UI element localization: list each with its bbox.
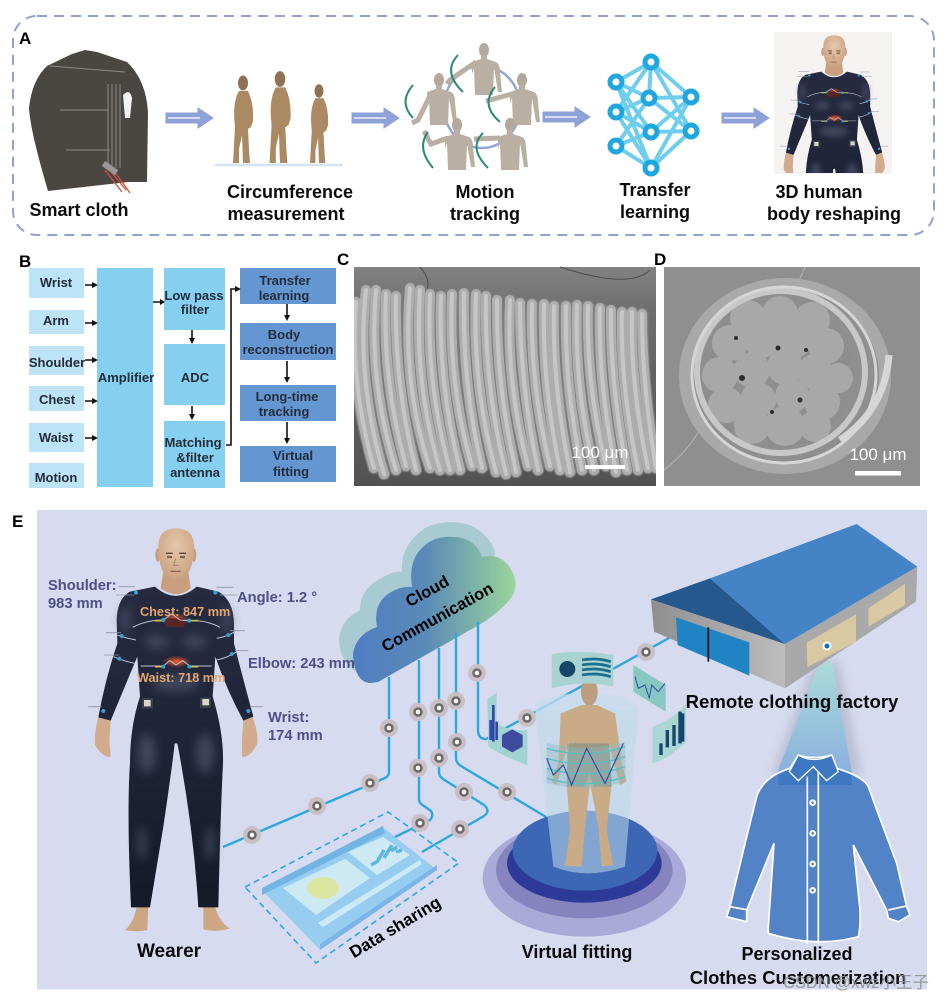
panel E background xyxy=(37,510,927,990)
filter and ADC column: antenna xyxy=(170,465,221,480)
sensor input boxes: Shoulder xyxy=(29,355,85,370)
network nodes xyxy=(243,643,655,844)
sensor input boxes: Motion xyxy=(35,470,77,485)
processing column: Body xyxy=(268,327,301,342)
scale bar C: 100 μm xyxy=(571,443,629,462)
three body figures xyxy=(215,71,343,165)
cloud communication: Cloud xyxy=(403,572,452,611)
beam source dot xyxy=(822,642,832,650)
wearer figure xyxy=(88,528,263,931)
processing column: learning xyxy=(259,288,309,303)
processing column: Long-time xyxy=(256,389,318,404)
wearer measurements: Chest: 847 mm xyxy=(140,605,230,619)
wearer measurements: Shoulder: xyxy=(48,578,117,594)
arrow 3 xyxy=(543,107,590,127)
processing column: reconstruction xyxy=(242,342,334,357)
flow arrows xyxy=(85,282,290,445)
virtual fitting platform xyxy=(483,652,686,937)
wearer measurements: Elbow: 243 mm xyxy=(248,656,355,672)
floating wave band xyxy=(547,742,626,788)
motion tracking label: Motion xyxy=(456,182,514,202)
sensor input boxes: Wrist xyxy=(40,275,73,290)
cloud communication: Communication xyxy=(379,580,496,656)
amplifier box xyxy=(97,268,154,487)
custom shirt xyxy=(727,755,910,944)
filter and ADC column: &filter xyxy=(176,450,214,465)
panel B: block diagram xyxy=(19,252,336,488)
projection beam xyxy=(772,660,862,775)
customization label: Clothes Customerization xyxy=(690,967,906,988)
motion tracking label xyxy=(450,182,520,224)
panel D letter: D xyxy=(654,250,666,269)
panel A letter: A xyxy=(19,29,31,48)
transfer learning label: learning xyxy=(620,202,690,222)
wearer measurements: Waist: 718 mm xyxy=(137,671,225,685)
virtual body xyxy=(552,678,627,867)
processing column: Transfer xyxy=(259,273,311,288)
customization label xyxy=(690,944,906,988)
arrow 2 xyxy=(352,108,399,128)
remote factory building xyxy=(651,524,917,688)
reshaping label: body reshaping xyxy=(767,204,901,224)
sensor input boxes: Chest xyxy=(39,392,76,407)
processing column: fitting xyxy=(273,464,309,479)
amplifier box: Amplifier xyxy=(98,370,154,385)
cloud communication xyxy=(339,522,515,683)
panel B letter: B xyxy=(19,252,31,271)
cross section micrograph xyxy=(664,267,920,486)
panel E: application scenario xyxy=(12,510,927,990)
reshaped body picture xyxy=(774,32,892,174)
wearer measurements: 174 mm xyxy=(268,728,323,744)
processing column xyxy=(240,268,336,482)
bars screen xyxy=(652,703,686,763)
smart cloth label: Smart cloth xyxy=(29,200,129,220)
panel D: SEM cross section xyxy=(654,250,920,486)
sensor input boxes: Waist xyxy=(39,430,74,445)
filter and ADC column: Low pass xyxy=(164,288,224,303)
transfer learning label xyxy=(619,180,691,222)
neural network icon xyxy=(610,56,697,174)
scale bar D: 100 μm xyxy=(849,445,907,464)
hexagon screen xyxy=(487,693,527,765)
circumference label: Circumference xyxy=(227,182,353,202)
sensor input boxes: Arm xyxy=(43,313,69,328)
panel A dashed frame xyxy=(13,16,934,235)
panel C: SEM micrograph of coil xyxy=(337,250,656,486)
wearer measurements xyxy=(48,578,355,744)
profile screen xyxy=(552,652,613,688)
sensor input boxes xyxy=(29,268,85,488)
coil micrograph xyxy=(354,267,656,486)
reshaping label: 3D human xyxy=(775,182,863,202)
motion tracking label: tracking xyxy=(450,204,520,224)
filter and ADC column xyxy=(164,268,225,488)
watermark: CSDN @xwz小王子 xyxy=(783,973,929,992)
factory label: Remote clothing factory xyxy=(686,691,899,712)
motion tracking figures xyxy=(406,43,540,170)
filter and ADC column: ADC xyxy=(181,370,210,385)
wave screen xyxy=(633,665,666,712)
filter and ADC column: filter xyxy=(181,302,209,317)
wearer measurements: Angle: 1.2 ° xyxy=(237,590,317,606)
panel A: workflow xyxy=(12,15,935,236)
reshaping label xyxy=(767,182,901,224)
processing column: tracking xyxy=(259,404,309,419)
processing column: Virtual xyxy=(273,448,313,463)
wearer label: Wearer xyxy=(137,941,202,962)
smart cloth photo xyxy=(29,50,148,193)
customization label: Personalized xyxy=(741,944,853,964)
data sharing tablet xyxy=(245,812,459,963)
circumference label xyxy=(227,182,353,224)
panel C letter: C xyxy=(337,250,349,269)
filter and ADC column: Matching xyxy=(164,435,222,450)
connection wires xyxy=(223,622,678,852)
data sharing label: Data sharing xyxy=(346,893,444,962)
scale bar D xyxy=(849,445,907,476)
transfer learning label: Transfer xyxy=(619,180,691,200)
arrow 1 xyxy=(166,108,213,128)
wearer measurements: Wrist: xyxy=(268,710,309,726)
virtual fitting label: Virtual fitting xyxy=(522,942,632,962)
arrow 4 xyxy=(722,108,769,128)
wearer measurements: 983 mm xyxy=(48,596,103,612)
panel E letter: E xyxy=(12,512,23,531)
circumference label: measurement xyxy=(227,204,345,224)
